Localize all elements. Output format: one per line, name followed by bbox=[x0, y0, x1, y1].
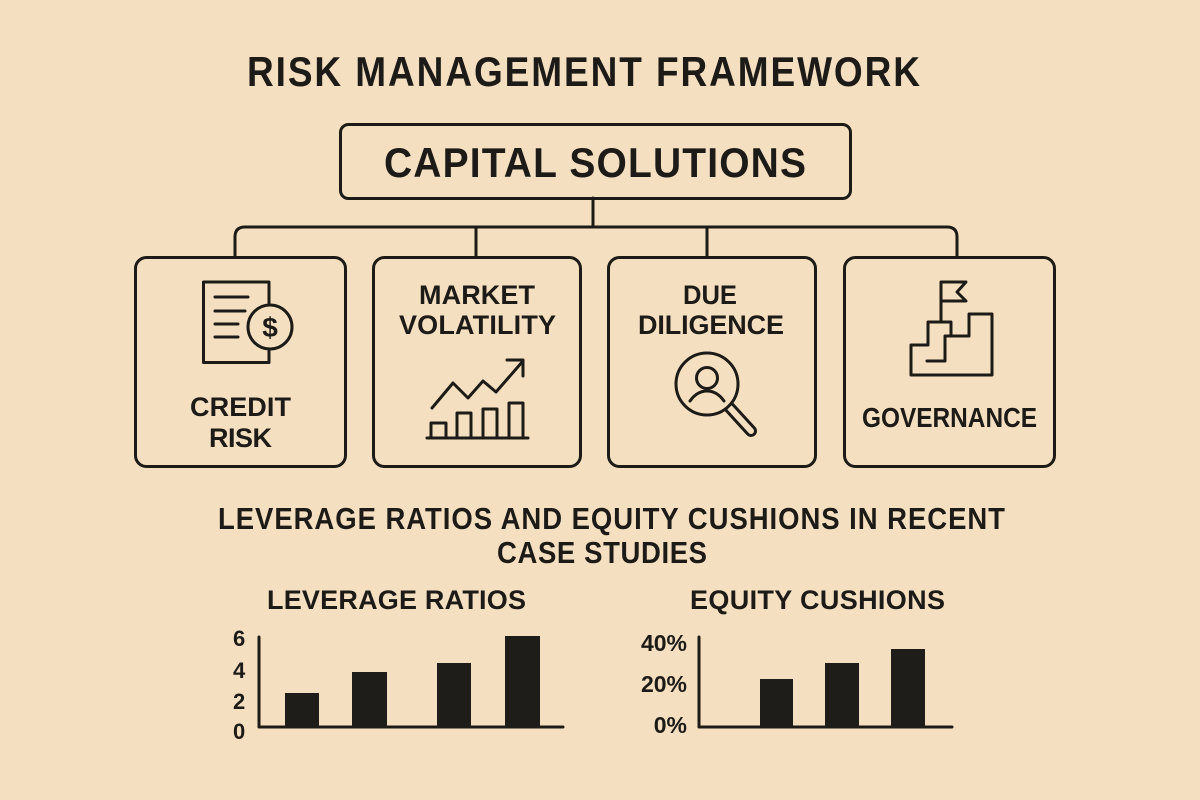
y-axis labels: 0% bbox=[654, 712, 687, 738]
axes bbox=[699, 637, 952, 727]
y-axis labels: 40% bbox=[641, 630, 687, 656]
chart title: equity cushions: EQUITY CUSHIONS bbox=[690, 585, 945, 615]
label: market volatility: VOLATILITY bbox=[399, 310, 556, 340]
icon: rising chart with arrow bbox=[427, 360, 528, 438]
chart title: leverage ratios: LEVERAGE RATIOS bbox=[267, 585, 526, 615]
label: due diligence bbox=[638, 280, 784, 340]
panel: due diligence bbox=[608, 258, 816, 466]
panel: credit risk bbox=[136, 258, 346, 466]
icon: document with dollar coin bbox=[204, 282, 292, 362]
y-axis labels: 2 bbox=[233, 689, 245, 714]
bars bbox=[285, 636, 540, 728]
top box: Capital Solutions bbox=[340, 124, 850, 198]
chart: leverage ratios bbox=[233, 585, 563, 744]
bars bbox=[760, 649, 925, 728]
label: credit risk bbox=[190, 392, 292, 453]
y-axis labels: 4 bbox=[233, 658, 246, 683]
label: market volatility bbox=[399, 280, 556, 340]
connector lines bbox=[235, 198, 957, 257]
icon: flag on stairs bbox=[911, 282, 992, 375]
panel: governance bbox=[844, 258, 1054, 466]
icon: document with dollar coin: $ bbox=[262, 312, 278, 343]
label: market volatility: MARKET bbox=[419, 280, 536, 310]
chart: equity cushions bbox=[641, 585, 952, 738]
title: RISK MANAGEMENT FRAMEWORK bbox=[247, 49, 920, 96]
icon: magnifier with person bbox=[676, 353, 751, 431]
section heading bbox=[218, 503, 1005, 570]
axes bbox=[259, 637, 563, 727]
section heading: LEVERAGE RATIOS AND EQUITY CUSHIONS IN RECENT bbox=[218, 503, 1005, 536]
panel: market volatility bbox=[374, 258, 580, 466]
label: credit risk: CREDIT bbox=[190, 392, 292, 422]
label: credit risk: RISK bbox=[209, 423, 272, 453]
label: due diligence: DILIGENCE bbox=[638, 310, 784, 340]
section heading: CASE STUDIES bbox=[497, 537, 707, 570]
y-axis labels bbox=[233, 626, 246, 744]
label: due diligence: DUE bbox=[683, 280, 737, 310]
y-axis labels: 20% bbox=[641, 671, 687, 697]
y-axis labels: 0 bbox=[233, 719, 245, 744]
label: governance: GOVERNANCE bbox=[862, 402, 1037, 433]
top box: Capital Solutions: CAPITAL SOLUTIONS bbox=[384, 139, 806, 186]
y-axis labels bbox=[641, 630, 687, 738]
y-axis labels: 6 bbox=[233, 626, 245, 651]
